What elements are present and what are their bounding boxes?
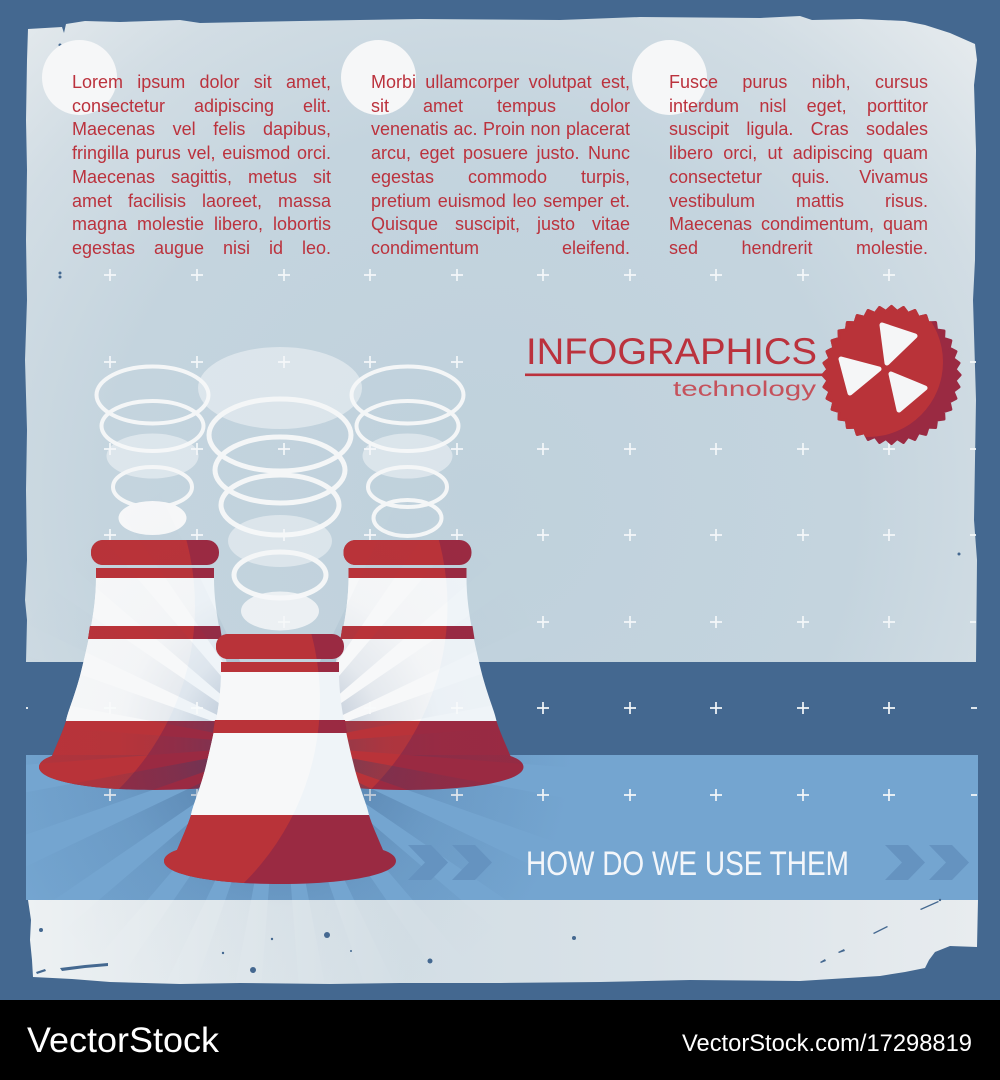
text column 1: Maecenas vel felis dapibus, [72,119,331,139]
text column 1: magna molestie libero, lobortis [72,214,331,234]
banner heading: HOW DO WE USE THEM [526,845,849,883]
smoke: left tower [96,366,208,535]
text column 2: egestas commodo turpis, [371,167,630,187]
text column 1: amet facilisis laoreet, massa [72,191,331,211]
text column 3: Fusce purus nibh, cursus [669,72,928,92]
text column 1: Maecenas sagittis, metus sit [72,167,331,187]
smoke: centre tower [198,347,362,630]
footer brand: VectorStock [27,1021,220,1060]
light blue banner [26,755,978,900]
text column 2: condimentum eleifend. [371,238,630,258]
text column 3: interdum nisl eget, porttitor [669,96,928,116]
seal: dark scalloped base [823,306,960,444]
text column 1: egestas augue nisi id leo. [72,238,331,258]
text column 3: consectetur quis. Vivamus [669,167,928,187]
text column 1: Lorem ipsum dolor sit amet, [72,72,331,92]
splatter specks [36,44,960,974]
text column 1 [72,72,331,258]
subtitle: technology: technology [673,378,817,401]
title: infographics: INFOGRAPHICS [526,330,817,372]
text column 1: fringilla purus vel, euismod orci. [72,143,331,163]
title underline [525,374,825,376]
text column 2: Morbi ullamcorper volutpat est, [371,72,630,92]
cooling tower: right [292,540,524,790]
text column 3: Maecenas condimentum, quam [669,214,928,234]
seal: red lit area [822,304,943,437]
torn paper: bottom strip [28,900,978,984]
text column 1: consectetur adipiscing elit. [72,96,331,116]
chevrons: right pair [885,845,969,880]
dark blue band [0,662,1000,755]
circle marker: column 1 [42,40,117,115]
seal badge with radiation icon [823,306,960,444]
text column 2: sit amet tempus dolor [371,96,630,116]
text column 2: pretium euismod leo semper et. [371,191,630,211]
text column 2: arcu, eget posuere justo. Nunc [371,143,630,163]
text column 2: venenatis ac. Proin non placerat [371,119,630,139]
torn paper: upper panel [25,16,977,662]
text column 3: sed hendrerit molestie. [669,238,928,258]
text column 2: Quisque suscipit, justo vitae [371,214,630,234]
circle marker: column 2 [341,40,416,115]
text column 3: suscipit ligula. Cras sodales [669,119,928,139]
cooling tower: centre [164,634,396,884]
light rays behind centre tower [0,478,575,1040]
radiation icon triangles [841,325,925,410]
text column 3 [669,72,928,258]
smoke: right tower [352,366,464,536]
text column 3: vestibulum mattis risus. [669,191,928,211]
faint plus marks over tower bodies [104,702,463,714]
darker rays on the banner [64,755,476,900]
cooling tower: left [39,540,271,790]
footer image id: VectorStock.com/17298819 [682,1030,972,1057]
footer bar [0,1000,1000,1080]
text column 2 [371,72,630,258]
circle marker: column 3 [632,40,707,115]
chevrons: left pair [408,845,492,880]
white plus grid [26,269,977,801]
text column 3: libero orci, ut adipiscing quam [669,143,928,163]
